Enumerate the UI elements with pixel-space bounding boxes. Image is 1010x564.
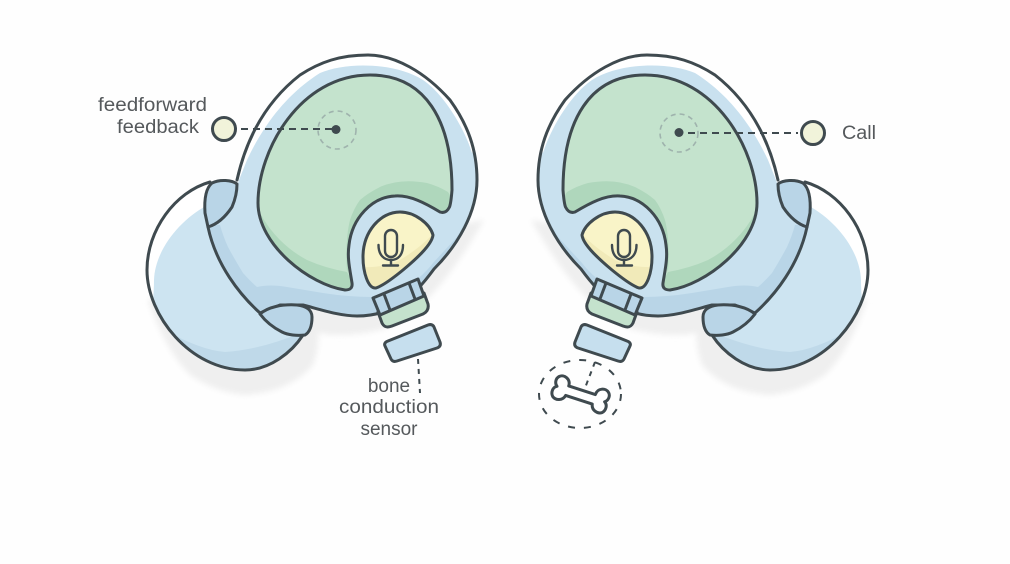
labels: feedforward feedback: feedback xyxy=(117,117,200,138)
leader line: bone icon xyxy=(585,362,595,388)
icon: microphone xyxy=(378,230,403,266)
earbud body: right xyxy=(536,54,808,318)
panel: right earbud xyxy=(525,30,876,428)
microphone pod: left xyxy=(362,210,434,290)
icon: bone xyxy=(550,374,611,415)
mirrored earbud artwork xyxy=(525,30,868,395)
connector: right xyxy=(587,279,642,327)
green speaker area: right xyxy=(559,75,765,295)
ear tip: left xyxy=(146,180,304,372)
shadow: left earbud xyxy=(148,220,484,395)
sensor block: left xyxy=(385,325,440,361)
label: Call: Call xyxy=(842,123,876,144)
labels: feedforward feedback: feedforward xyxy=(98,95,207,116)
panel: left earbud xyxy=(98,30,490,440)
tragus: left xyxy=(205,180,237,227)
callout: left microphone target xyxy=(212,111,356,149)
callout: right microphone target xyxy=(660,114,824,152)
label: bone conduction sensor: sensor xyxy=(360,419,418,440)
shadow: right earbud xyxy=(531,220,867,395)
sensor block: right xyxy=(575,325,630,361)
connector: left xyxy=(373,279,428,327)
labels: feedforward feedback xyxy=(98,95,207,138)
lower nub: right xyxy=(703,305,755,335)
label: bone conduction sensor xyxy=(339,376,439,440)
icon: microphone xyxy=(612,230,636,266)
ear tip: right xyxy=(711,180,870,372)
earbud body: left xyxy=(206,54,478,318)
dashed ring: bone icon xyxy=(539,360,621,428)
green speaker area: left xyxy=(250,75,456,295)
label: bone conduction sensor: conduction xyxy=(339,397,439,418)
label: bone conduction sensor: bone xyxy=(368,376,410,397)
tragus: right xyxy=(778,180,810,227)
lower nub: left xyxy=(260,305,312,335)
microphone pod: right xyxy=(580,210,654,290)
leader line: bone sensor xyxy=(418,359,420,393)
